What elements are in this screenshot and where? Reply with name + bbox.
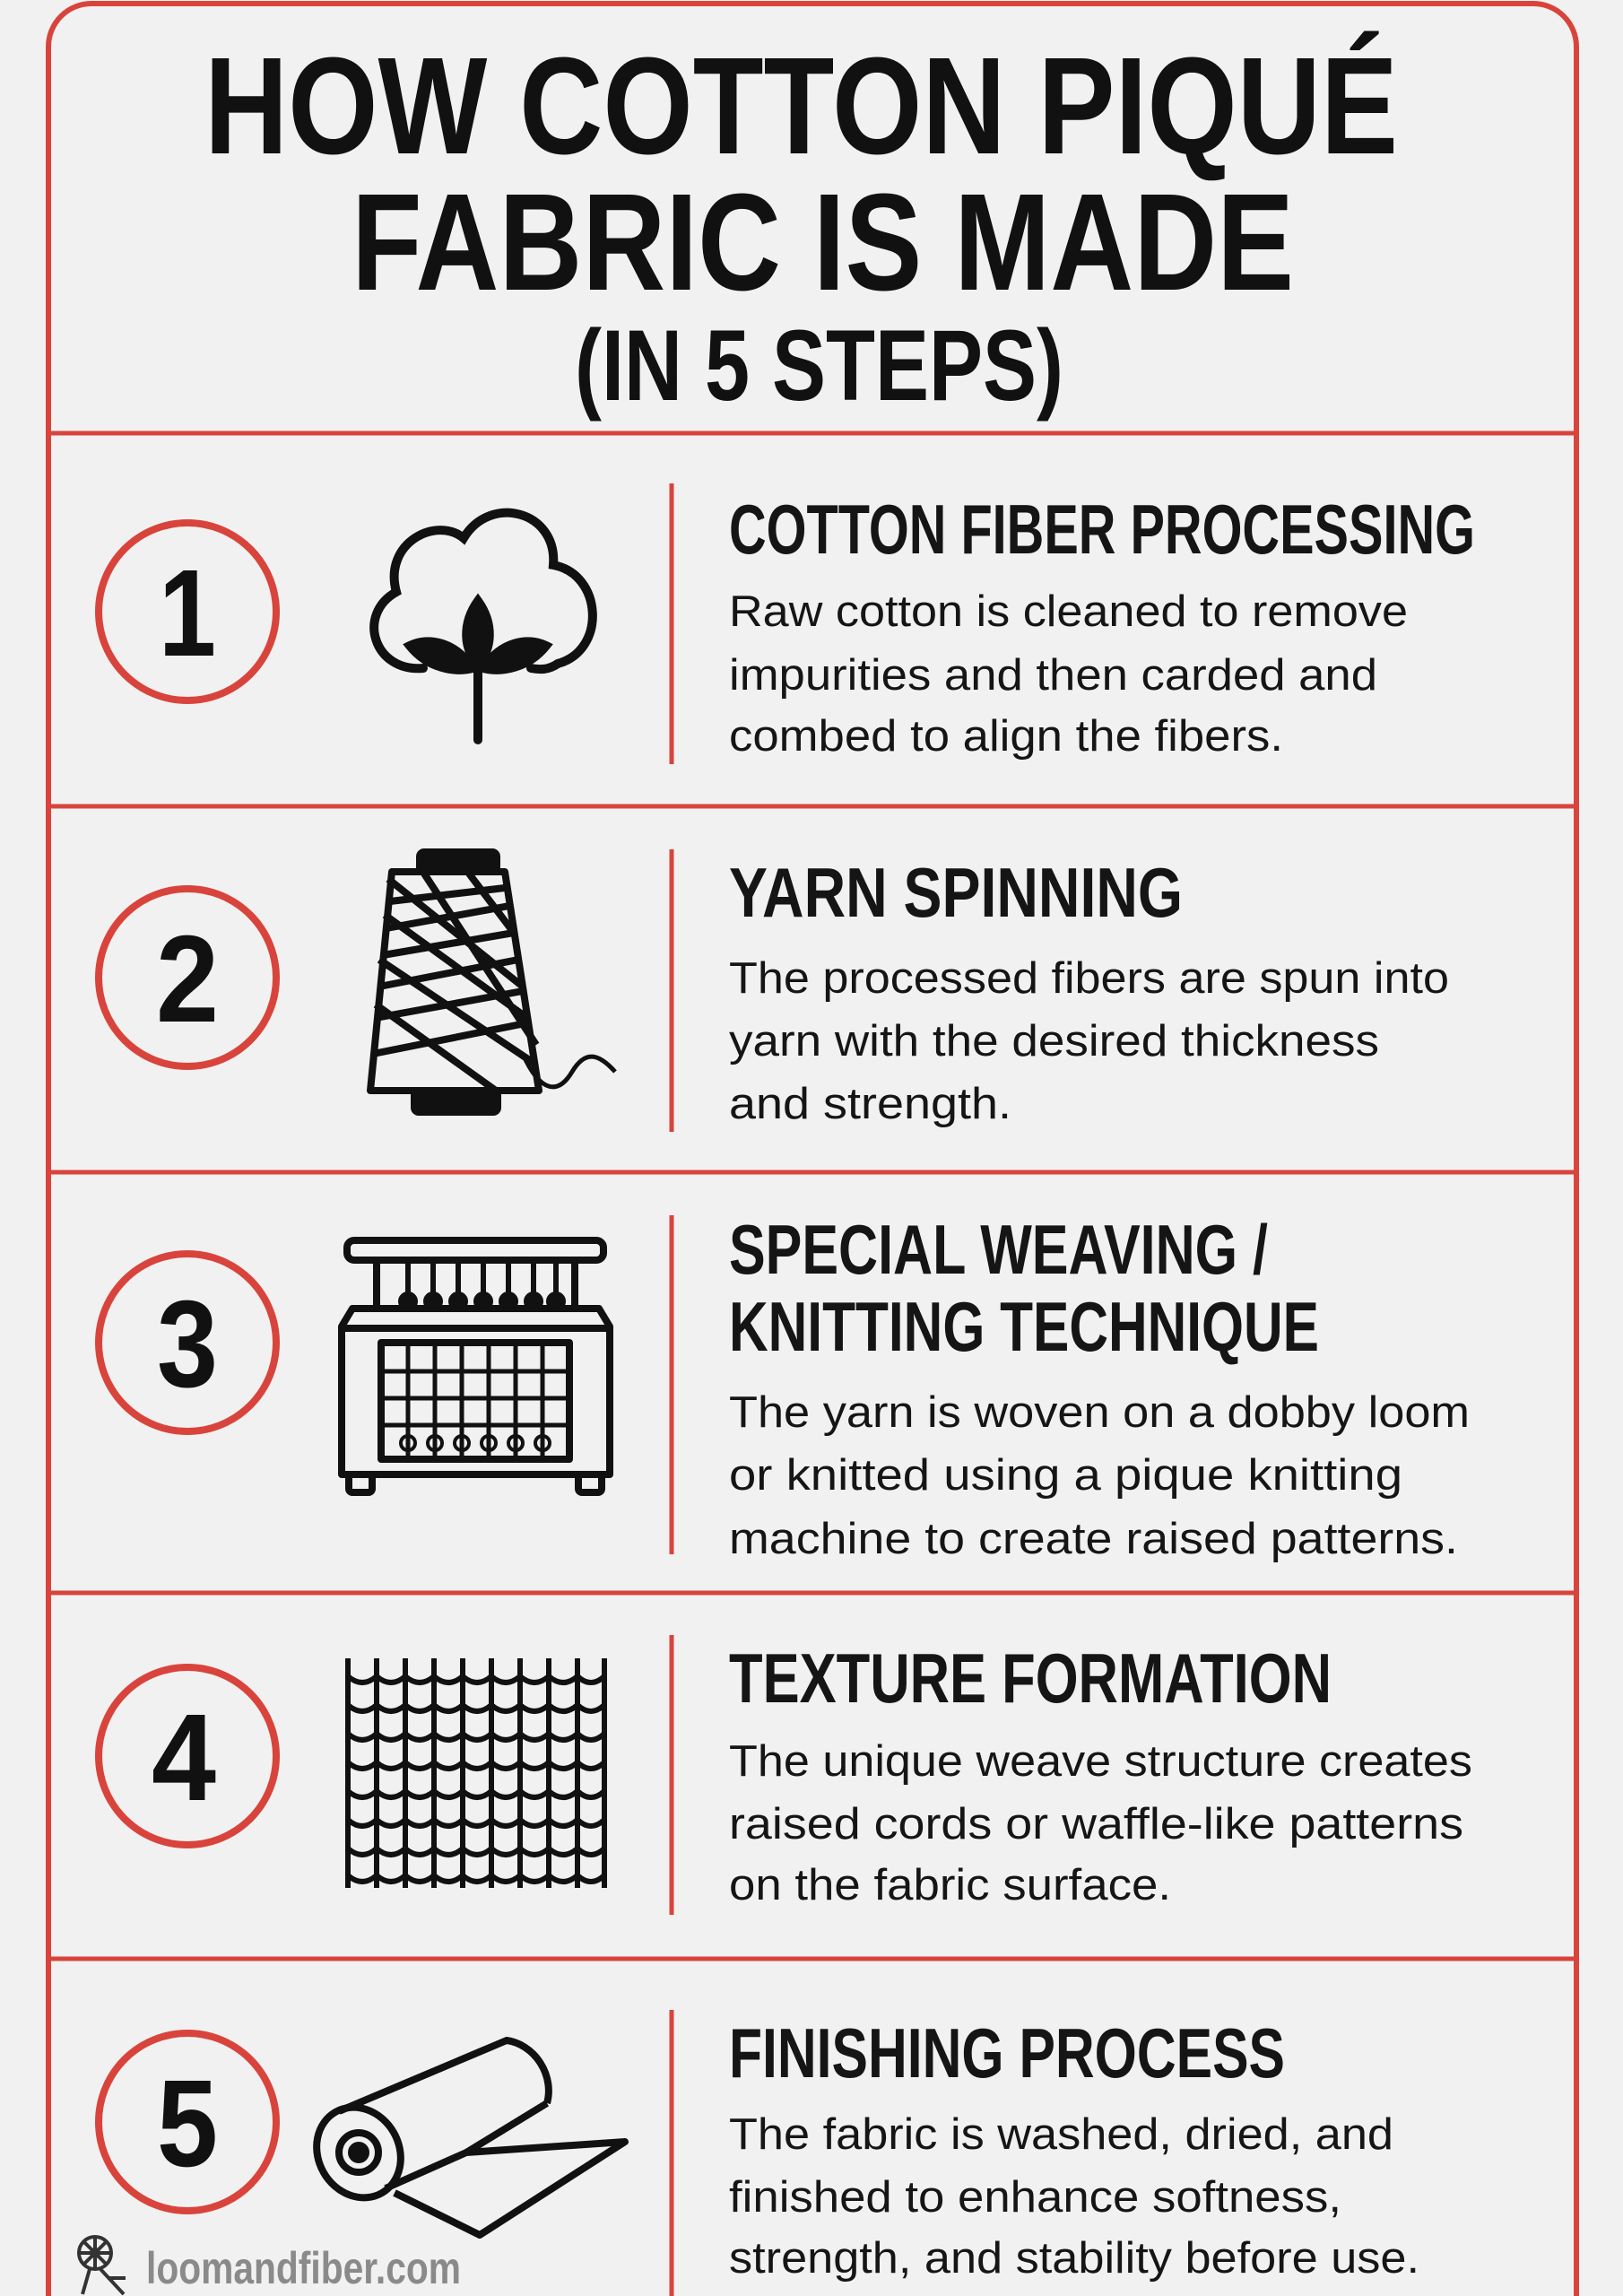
heading 3 [729, 1210, 1319, 1366]
title: FABRIC IS MADE [352, 165, 1294, 319]
step 4 [99, 1635, 1472, 1915]
body 2 [729, 954, 1449, 1128]
number badge 5: 5 [157, 2055, 218, 2193]
body 3 [729, 1388, 1470, 1563]
number badge 4: 4 [152, 1689, 216, 1827]
body 1: combed to align the fibers. [729, 712, 1283, 761]
body 4: raised cords or waffle-like patterns [729, 1800, 1463, 1848]
body 5 [729, 2110, 1419, 2283]
body 2: and strength. [729, 1080, 1011, 1128]
heading 4: TEXTURE FORMATION [729, 1639, 1332, 1718]
body 5: finished to enhance softness, [729, 2173, 1341, 2222]
body 4: The unique weave structure creates [729, 1737, 1472, 1786]
body 4: on the fabric surface. [729, 1861, 1171, 1909]
body 1: Raw cotton is cleaned to remove [729, 587, 1408, 636]
body 4 [729, 1737, 1472, 1909]
number badge 1: 1 [159, 544, 216, 683]
title [204, 29, 1398, 422]
step 5 [99, 2010, 1419, 2296]
heading 2: YARN SPINNING [729, 853, 1183, 932]
step 3 [99, 1210, 1470, 1563]
number badge 4 [99, 1667, 276, 1845]
number badge 2: 2 [156, 910, 219, 1048]
body 1: impurities and then carded and [729, 651, 1377, 700]
title: HOW COTTON PIQUÉ [204, 29, 1398, 183]
body 5: strength, and stability before use. [729, 2234, 1419, 2283]
body 3: machine to create raised patterns. [729, 1515, 1458, 1563]
body 3: or knitted using a pique knitting [729, 1451, 1402, 1500]
icon: textured fabric grid [348, 1658, 604, 1888]
heading 3: KNITTING TECHNIQUE [729, 1287, 1319, 1366]
body 1 [729, 587, 1408, 761]
number badge 5 [99, 2033, 276, 2211]
icon: spinning wheel [79, 2237, 126, 2294]
footer logo: loomandfiber.com [146, 2243, 461, 2293]
title: (IN 5 STEPS) [575, 309, 1063, 422]
body 2: yarn with the desired thickness [729, 1017, 1379, 1065]
body 2: The processed fibers are spun into [729, 954, 1449, 1003]
icon: knitting loom [342, 1240, 610, 1492]
number badge 3 [99, 1254, 276, 1431]
heading 5: FINISHING PROCESS [729, 2013, 1285, 2092]
number badge 2 [99, 889, 276, 1066]
heading 3: SPECIAL WEAVING / [729, 1210, 1268, 1289]
icon: yarn cone [370, 852, 615, 1112]
icon: fabric roll [300, 2040, 625, 2235]
step 1 [99, 483, 1475, 764]
body 5: The fabric is washed, dried, and [729, 2110, 1393, 2159]
body 3: The yarn is woven on a dobby loom [729, 1388, 1470, 1437]
footer logo [79, 2237, 461, 2294]
number badge 1 [99, 523, 276, 700]
step 2 [99, 849, 1449, 1132]
icon: cotton boll [374, 513, 593, 740]
number badge 3: 3 [157, 1275, 218, 1413]
